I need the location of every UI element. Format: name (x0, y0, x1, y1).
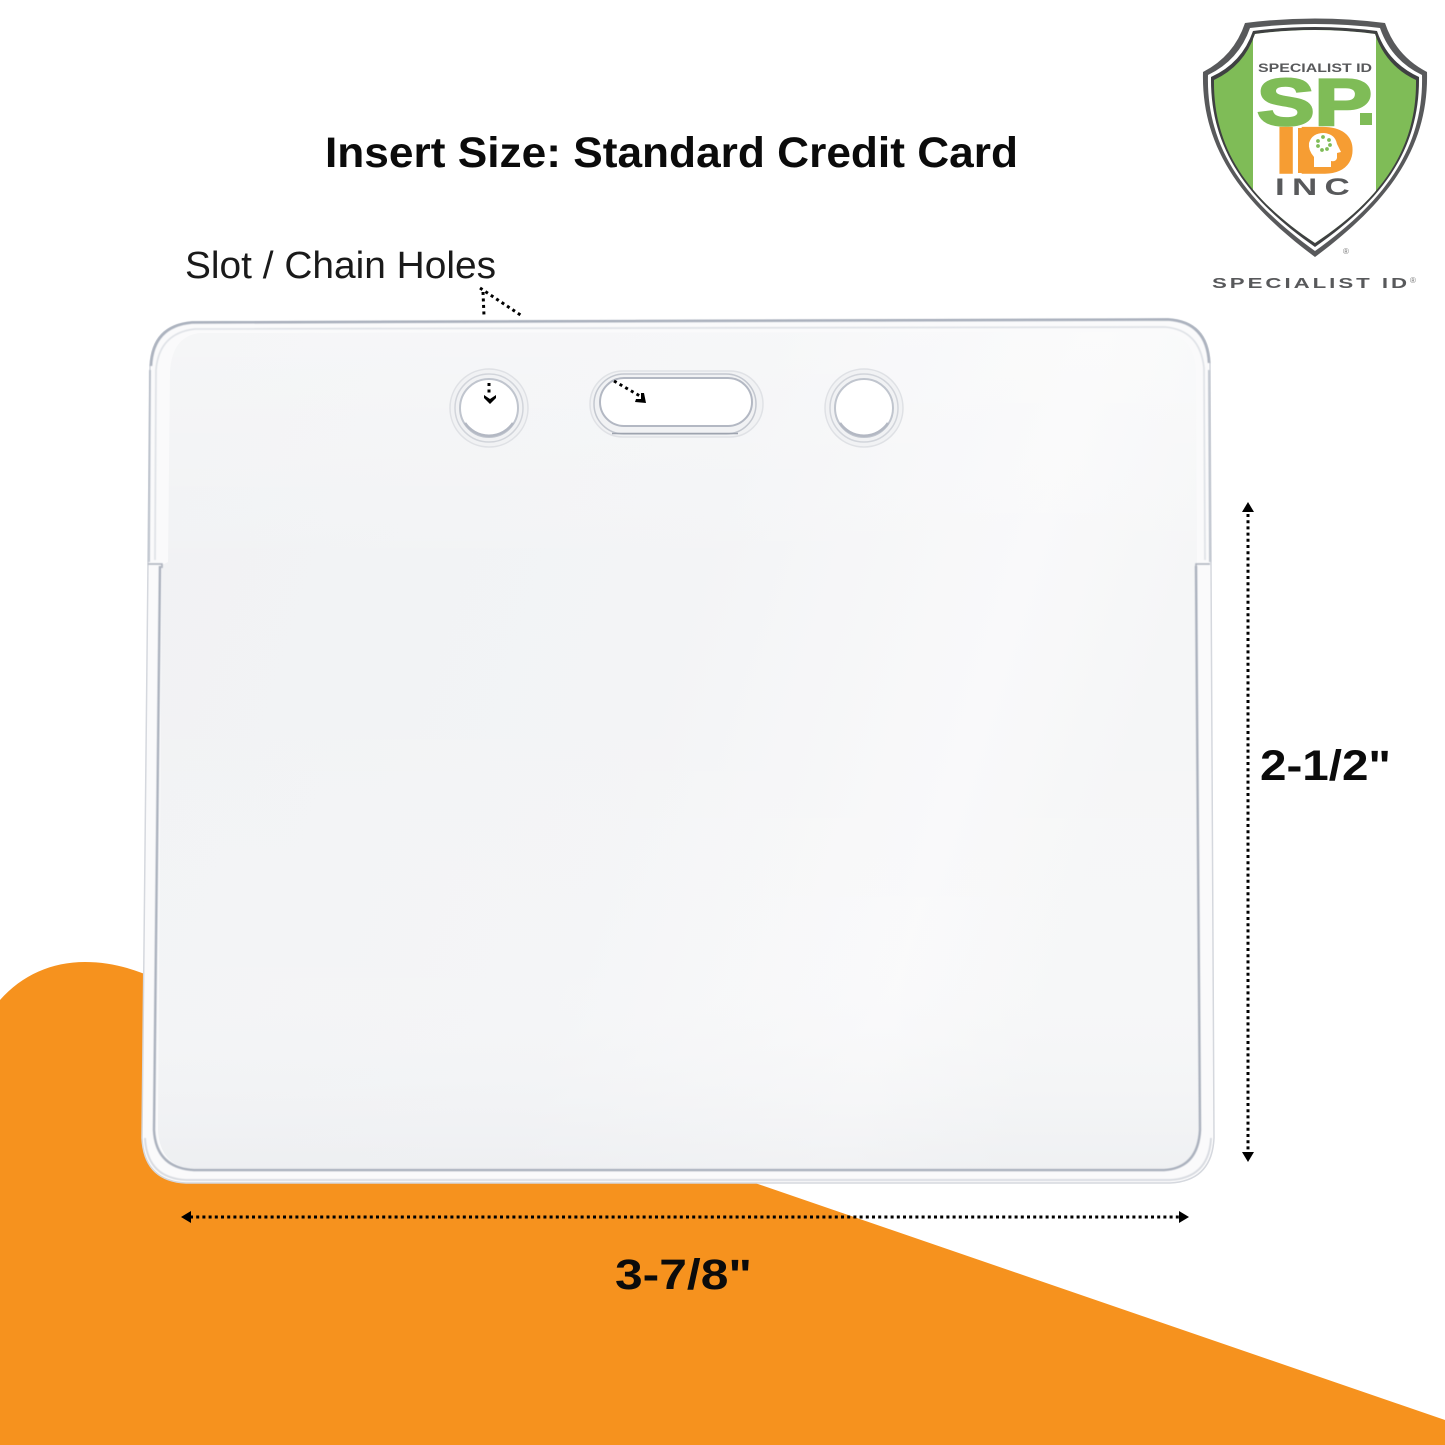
width label: 3-7/8" (615, 1251, 752, 1299)
logo SP letters: SP (1257, 65, 1372, 139)
wordmark registered mark: ® (1410, 276, 1416, 285)
right round hole (825, 369, 903, 447)
logo wordmark: SPECIALIST ID (1212, 275, 1410, 292)
logo head icon (1309, 133, 1341, 167)
badge holder (142, 319, 1214, 1183)
title: Insert Size: Standard Credit Card (325, 129, 1018, 177)
logo INC: INC (1275, 174, 1357, 201)
width dimension arrow (181, 1211, 1189, 1223)
center slot (590, 371, 763, 437)
logo ID letters: ID (1275, 113, 1355, 187)
logo head dots (1316, 135, 1332, 152)
height label: 2-1/2" (1260, 742, 1391, 790)
registered mark: ® (1343, 247, 1349, 256)
label: slot / chain holes: Slot / Chain Holes (185, 245, 496, 287)
top seam lines (149, 320, 1210, 562)
inner sheet (158, 332, 1200, 1168)
left round hole (450, 369, 528, 447)
logo: Specialist ID shield (1203, 18, 1427, 292)
background orange swoosh (0, 962, 1445, 1445)
height dimension arrow (1242, 502, 1254, 1162)
pocket seam (145, 564, 1211, 1180)
shield outer (1203, 18, 1427, 257)
logo small text: SPECIALIST ID (1258, 61, 1372, 75)
shield thin line (1211, 27, 1419, 247)
shield white ring (1208, 24, 1422, 251)
logo D fill (1298, 128, 1352, 173)
logo dot (1360, 113, 1372, 125)
pointer arrows from label to holes (480, 288, 646, 404)
shield green field (1214, 30, 1416, 243)
holder outer body (142, 319, 1214, 1183)
shield white centre (1253, 30, 1376, 243)
